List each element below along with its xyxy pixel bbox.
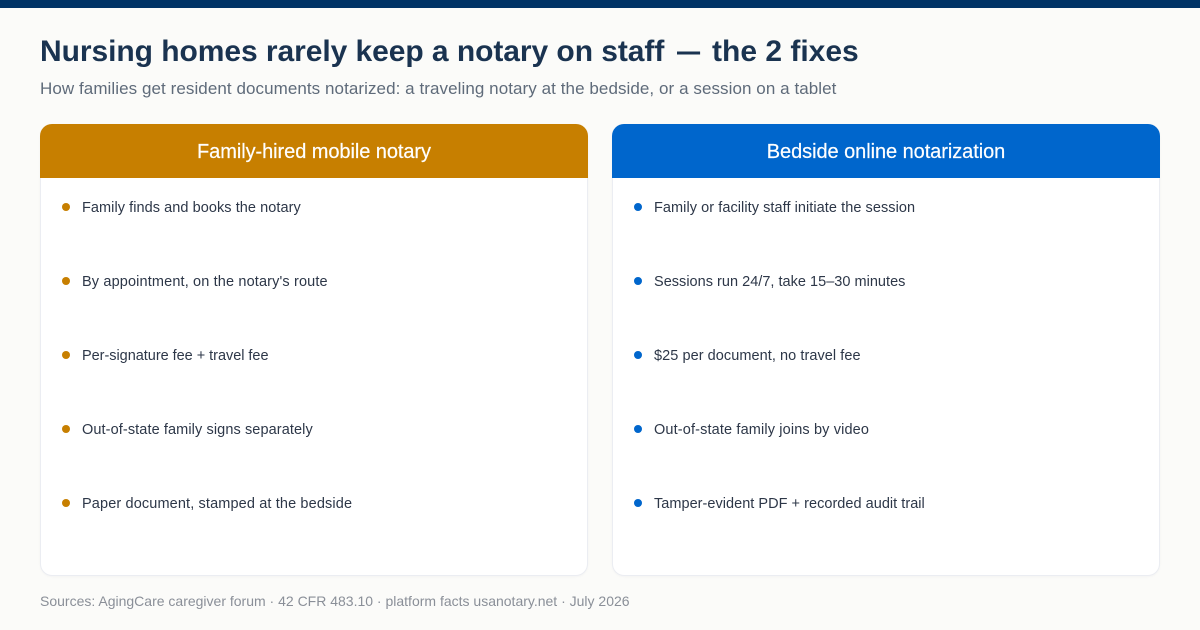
panel: family-hired mobile notary <box>40 124 588 576</box>
list item: paper document: Paper document, stamped at the bedside <box>82 496 352 512</box>
list item: price: $25 per document, no travel fee <box>654 348 861 364</box>
sources footer: Sources: AgingCare caregiver forum · 42 CFR 483.10 · platform facts usanotary.net · July 2026 <box>40 593 630 609</box>
panel heading: online notarization <box>612 124 1160 178</box>
subtitle: How families get resident documents notarized: a traveling notary at the bedside, or a session on a tablet <box>40 79 836 98</box>
list item: video: Out-of-state family joins by video <box>654 422 869 438</box>
list item: fees: Per-signature fee + travel fee <box>82 348 268 364</box>
title: the 2 fixes <box>712 35 859 68</box>
panel heading: online notarization: Bedside online notarization <box>767 141 1005 163</box>
top accent bar <box>0 0 1200 8</box>
list item: out-of-state family: Out-of-state family signs separately <box>82 422 313 438</box>
panel heading: mobile notary: Family-hired mobile notary <box>197 141 431 163</box>
title: Nursing homes rarely keep a notary on staff <box>40 35 664 68</box>
list item: session hours: Sessions run 24/7, take 15–30 minutes <box>654 274 905 290</box>
title: — <box>677 35 700 68</box>
list item: finds and books: Family finds and books the notary <box>82 200 301 216</box>
panel heading: mobile notary <box>40 124 588 178</box>
panel: bedside online notarization <box>612 124 1160 576</box>
list item: appointment: By appointment, on the notary's route <box>82 274 328 290</box>
list item: audit trail: Tamper-evident PDF + recorded audit trail <box>654 496 925 512</box>
list item: initiate session: Family or facility staff initiate the session <box>654 200 915 216</box>
